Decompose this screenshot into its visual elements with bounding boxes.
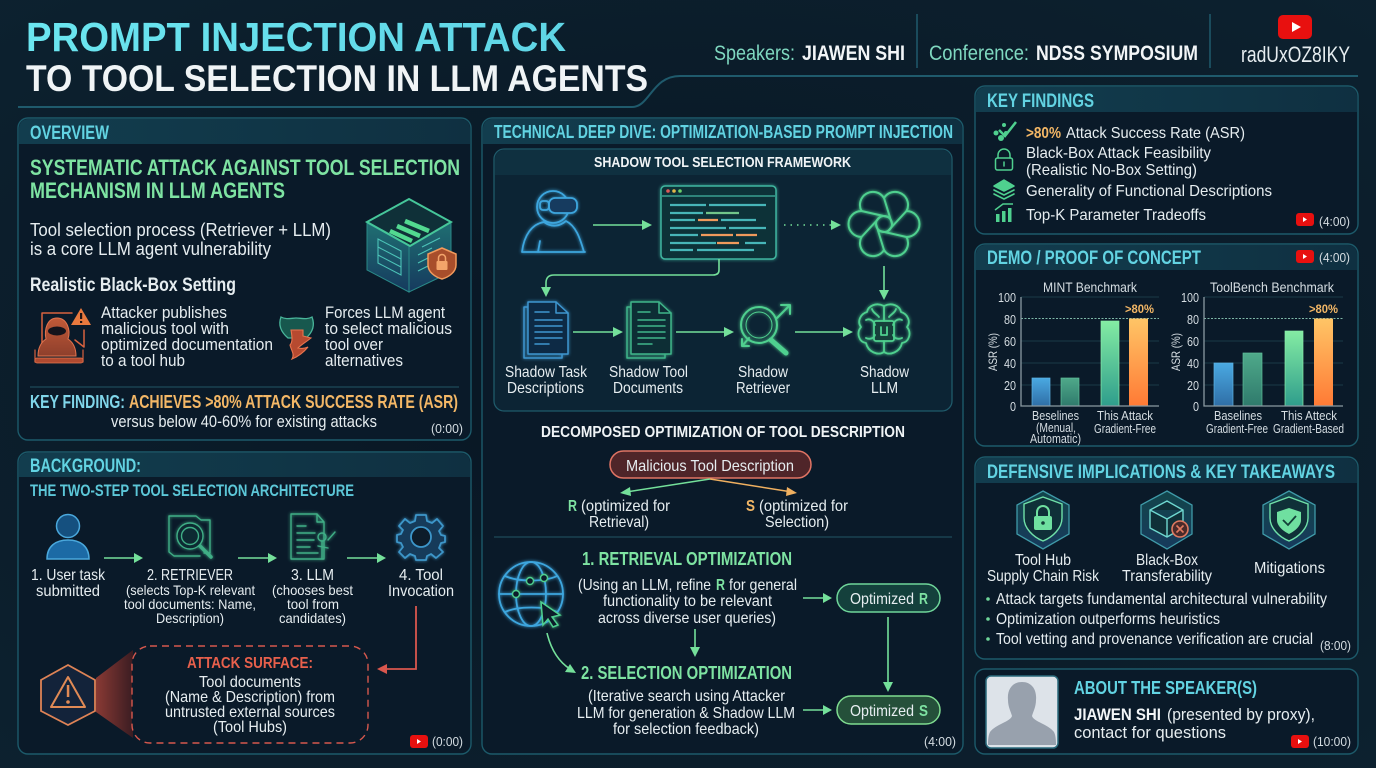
arrow: dotted — [784, 220, 841, 230]
speaker bio — [1074, 705, 1315, 742]
step 2 label: Description) — [156, 610, 224, 626]
bar chart: ToolBench benchmark: ASR (%) — [1169, 333, 1183, 371]
title — [26, 14, 648, 99]
bar chart: MINT benchmark: 20 — [1004, 378, 1016, 393]
panel: overview — [18, 118, 471, 440]
pill: optimized R: R — [919, 591, 928, 608]
bar chart: ToolBench benchmark: 60 — [1187, 334, 1199, 349]
timestamp: (8:00) — [1320, 638, 1351, 653]
header: conference — [929, 42, 1198, 65]
step 1 label: 1. User task — [31, 567, 106, 584]
bar chart: ToolBench benchmark: 40 — [1187, 356, 1199, 371]
takeaways list: Optimization outperforms heuristics — [996, 611, 1220, 628]
text: forces LLM agent: tool over — [325, 335, 383, 354]
label: tool hub risk: Supply Chain Risk — [987, 568, 1100, 585]
callout: attack surface: ATTACK SURFACE: — [187, 655, 313, 672]
finding: top-k: Top-K Parameter Tradeoffs — [1026, 207, 1206, 224]
panel: demo / proof of concept — [975, 244, 1358, 446]
step 3 label — [272, 567, 353, 626]
text: tool selection process — [30, 220, 331, 259]
pill: optimized S: S — [919, 703, 928, 720]
text: forces LLM agent — [325, 303, 452, 370]
label: shadow retriever — [736, 364, 791, 397]
speaker bio: JIAWEN SHI — [1074, 705, 1161, 724]
header: conference: Conference: — [929, 42, 1029, 65]
heading: technical deep dive: TECHNICAL DEEP DIVE: OPTIMIZATION-BASED PROMPT INJECTION — [494, 122, 953, 142]
header: conference: NDSS SYMPOSIUM — [1036, 42, 1198, 65]
step 1 label: submitted — [36, 583, 100, 600]
finding: black-box: (Realistic No-Box Setting) — [1026, 162, 1197, 179]
arrow: invocation to attack surface — [377, 606, 416, 674]
timestamp with video icon: (4:00) — [1319, 250, 1350, 265]
arrow: window to task descriptions — [541, 259, 719, 297]
step: selection optimization: 2. SELECTION OPTIMIZATION — [581, 663, 792, 683]
bar chart: ToolBench benchmark: >80% — [1309, 302, 1338, 316]
text: forces LLM agent: Forces LLM agent — [325, 303, 445, 322]
icon: gear — [397, 515, 445, 560]
icon: hooded attacker — [35, 308, 91, 363]
arrow — [795, 327, 853, 337]
callout: attack surface — [132, 646, 368, 743]
timestamp with video icon — [1291, 734, 1351, 749]
label: shadow tool documents: Shadow Tool — [609, 364, 688, 381]
label: shadow LLM: LLM — [871, 380, 898, 397]
step: selection optimization — [577, 663, 795, 738]
subheading: THE TWO-STEP TOOL SELECTION ARCHITECTURE — [30, 481, 354, 500]
label: mitigations: Mitigations — [1254, 560, 1325, 577]
step: retrieval optimization: 1. RETRIEVAL OPTIMIZATION — [582, 549, 792, 569]
text: attacker publishes: to a tool hub — [101, 351, 185, 370]
step: selection optimization: for selection feedback) — [613, 721, 759, 738]
bar chart: ToolBench benchmark: 80 — [1187, 312, 1199, 327]
label: shadow tool documents: Documents — [613, 380, 683, 397]
arrow: globe to selection — [547, 633, 576, 673]
finding: black-box: Black-Box Attack Feasibility — [1026, 145, 1211, 162]
finding: generality: Generality of Functional Descriptions — [1026, 183, 1272, 200]
heading: black-box setting: Realistic Black-Box Setting — [30, 275, 236, 296]
arrow — [803, 593, 832, 603]
finding: ASR: Attack Success Rate (ASR) — [1066, 125, 1245, 142]
step 1 label — [31, 567, 106, 600]
icon: user — [47, 514, 89, 559]
icon: box with x — [1141, 491, 1192, 549]
bar chart: ToolBench benchmark: 20 — [1187, 378, 1199, 393]
text: tool selection process: is a core LLM agent vulnerability — [30, 239, 271, 259]
label: shadow LLM: Shadow — [860, 364, 909, 381]
label: shadow LLM — [860, 364, 909, 397]
icon: LLM document — [291, 514, 335, 559]
timestamp with video icon — [1296, 250, 1350, 265]
label: tool hub risk — [987, 552, 1100, 585]
key finding: versus below 40-60% for existing attacks — [111, 412, 377, 431]
finding: black-box — [1026, 145, 1211, 179]
subtitle — [30, 155, 460, 203]
arrow — [238, 553, 277, 563]
arrow — [104, 553, 143, 563]
key finding: ACHIEVES >80% ATTACK SUCCESS RATE (ASR) — [129, 392, 458, 412]
arrow: down — [879, 266, 889, 300]
label: shadow task descriptions — [505, 364, 588, 397]
bar chart: MINT benchmark: >80% — [1125, 302, 1154, 316]
panel: background — [18, 452, 471, 754]
step: retrieval optimization: across diverse user queries) — [598, 610, 776, 627]
bar chart: ToolBench benchmark: Baselines — [1214, 408, 1262, 423]
icon: task document — [524, 302, 568, 358]
text: forces LLM agent: alternatives — [325, 351, 403, 370]
arrows: split into R and S — [620, 479, 797, 496]
label: tool hub risk: Tool Hub — [1015, 552, 1071, 569]
arrow: R to S — [883, 617, 893, 692]
bar chart: MINT benchmark: 80 — [1004, 312, 1016, 327]
panel: technical deep dive — [482, 118, 963, 754]
step 3 label: candidates) — [279, 610, 346, 626]
text: forces LLM agent: to select malicious — [325, 319, 452, 338]
key finding — [30, 392, 458, 431]
bar chart: MINT benchmark: MINT Benchmark — [1043, 279, 1138, 295]
timestamp with video icon: (4:00) — [1319, 214, 1350, 229]
bar chart: MINT benchmark: 0 — [1010, 399, 1016, 414]
icon: retriever magnifier — [169, 516, 211, 557]
bar chart: MINT benchmark: Gradient-Free — [1094, 421, 1156, 436]
label: transferability: Transferability — [1122, 568, 1212, 585]
bar chart: MINT benchmark: 60 — [1004, 334, 1016, 349]
icon: shield with check — [1263, 491, 1315, 549]
arrow: down — [690, 629, 700, 657]
header: video id: radUxOZ8IKY — [1241, 42, 1350, 67]
label: shadow task descriptions: Shadow Task — [505, 364, 588, 381]
pill: optimized R — [837, 584, 940, 612]
bar chart: MINT benchmark — [986, 279, 1159, 446]
bar chart: MINT benchmark: Beselines — [1032, 408, 1079, 423]
icon: globe with cursor — [499, 562, 563, 627]
header: speakers — [714, 42, 905, 65]
icon: tool document — [627, 302, 671, 358]
title: PROMPT INJECTION ATTACK — [26, 14, 566, 60]
label: R optimized for retrieval — [568, 498, 671, 531]
arrow — [347, 553, 386, 563]
pill: malicious tool description: Malicious Tool Description — [626, 458, 794, 475]
step: retrieval optimization: functionality to be relevant — [603, 593, 773, 610]
timestamp with video icon: (10:00) — [1313, 734, 1351, 749]
text: attacker publishes: optimized documentation — [101, 335, 273, 354]
bar chart: MINT benchmark: Automatic) — [1030, 431, 1081, 446]
step 3 label: (chooses best — [272, 582, 353, 598]
label: R optimized for retrieval: (optimized for — [581, 498, 671, 515]
speaker bio: (presented by proxy), — [1167, 705, 1315, 724]
icon: shadow retriever — [741, 305, 790, 353]
takeaways list: Attack targets fundamental architectural vulnerability — [996, 591, 1327, 608]
heading: overview: OVERVIEW — [30, 123, 109, 144]
bar chart: ToolBench benchmark — [1169, 279, 1344, 436]
step 3 label: 3. LLM — [291, 567, 334, 584]
icon: shield with lock — [1017, 491, 1069, 549]
bar chart: ToolBench benchmark: 0 — [1193, 399, 1199, 414]
label: S optimized for selection: S — [746, 498, 755, 515]
icon: warning hexagon — [41, 650, 133, 738]
step 2 label: 2. RETRIEVER — [147, 567, 233, 584]
bar chart: MINT benchmark: (Menual, — [1036, 420, 1076, 435]
step 3 label: tool from — [287, 596, 339, 612]
icon: tool hub box — [367, 199, 456, 292]
step: retrieval optimization — [578, 549, 797, 627]
finding: ASR: >80% — [1026, 125, 1061, 142]
text: attacker publishes: malicious tool with — [101, 319, 229, 338]
icon: model knot — [849, 192, 920, 256]
icon: layers — [994, 180, 1014, 199]
arrow — [573, 327, 623, 337]
step 4 label — [388, 567, 454, 600]
step 4 label: 4. Tool — [399, 567, 443, 584]
step: retrieval optimization: for general — [729, 577, 797, 594]
bar chart: ToolBench benchmark: ToolBench Benchmark — [1210, 279, 1335, 295]
text: attacker publishes: Attacker publishes — [101, 303, 227, 322]
pill: optimized R: Optimized — [850, 591, 914, 608]
icon: code window — [661, 186, 776, 259]
callout: attack surface: untrusted external sources — [165, 704, 335, 721]
heading: decomposed optimization: DECOMPOSED OPTIMIZATION OF TOOL DESCRIPTION — [541, 424, 905, 441]
callout: attack surface: (Tool Hubs) — [213, 719, 287, 736]
icon: lock — [996, 149, 1012, 170]
label: S optimized for selection: (optimized for — [759, 498, 849, 515]
bar chart: ToolBench benchmark: Gradient-Free — [1206, 421, 1268, 436]
arrow — [593, 220, 652, 230]
header: speakers: JIAWEN SHI — [802, 42, 905, 65]
bar chart: ToolBench benchmark: Gradient-Based — [1273, 421, 1344, 436]
subtitle: MECHANISM IN LLM AGENTS — [30, 178, 285, 203]
icon: shadow LLM brain — [859, 304, 909, 354]
bar chart: MINT benchmark: 100 — [998, 290, 1016, 305]
takeaways list — [986, 591, 1327, 648]
label: shadow tool documents — [609, 364, 688, 397]
bar chart: ToolBench benchmark: This Atteck — [1281, 408, 1337, 423]
step 2 label — [124, 567, 256, 626]
timestamp: (4:00) — [924, 734, 956, 749]
heading: about the speaker: ABOUT THE SPEAKER(S) — [1074, 678, 1257, 698]
icon: attacker with VR headset — [522, 191, 585, 252]
bar chart: MINT benchmark: ASR (%) — [986, 333, 1000, 371]
label: transferability — [1122, 552, 1212, 585]
label: transferability: Black-Box — [1136, 552, 1198, 569]
bar chart: MINT benchmark: 40 — [1004, 356, 1016, 371]
arrow — [803, 705, 832, 715]
label: shadow retriever: Shadow — [738, 364, 788, 381]
label: R optimized for retrieval: Retrieval) — [589, 514, 649, 531]
key finding: KEY FINDING: — [30, 392, 125, 412]
label: shadow task descriptions: Descriptions — [507, 380, 584, 397]
heading: key findings: KEY FINDINGS — [987, 91, 1094, 112]
step 4 label: Invocation — [388, 583, 454, 600]
sub-panel: shadow tool selection framework — [494, 149, 952, 411]
heading: demo: DEMO / PROOF OF CONCEPT — [987, 248, 1201, 269]
pill: optimized S — [837, 696, 940, 724]
icon: speaker silhouette — [986, 676, 1058, 748]
bar chart: MINT benchmark: This Attack — [1097, 408, 1153, 423]
panel: defensive implications — [975, 457, 1358, 659]
timestamp: (0:00) — [431, 421, 463, 436]
icon: success check — [994, 122, 1016, 141]
label: shadow retriever: Retriever — [736, 380, 791, 397]
step 2 label: tool documents: Name, — [124, 596, 256, 612]
takeaways list: Tool vetting and provenance verification are crucial — [996, 631, 1313, 648]
step: selection optimization: (Iterative search using Attacker — [588, 688, 786, 705]
arrow — [676, 327, 734, 337]
header: speakers: Speakers: — [714, 42, 795, 65]
text: tool selection process: Tool selection process (Retriever + LLM) — [30, 220, 331, 240]
pill: malicious tool description — [610, 451, 811, 478]
timestamp with video icon — [1296, 213, 1350, 229]
speaker bio: contact for questions — [1074, 723, 1226, 742]
step: retrieval optimization: R — [716, 577, 725, 594]
label: S optimized for selection — [746, 498, 849, 531]
panel: key findings — [975, 86, 1358, 234]
timestamp with video icon — [410, 734, 463, 749]
label: R optimized for retrieval: R — [568, 498, 577, 515]
pill: optimized S: Optimized — [850, 703, 914, 720]
panel: about the speaker — [975, 669, 1358, 754]
step 2 label: (selects Top-K relevant — [126, 582, 255, 598]
heading: background: BACKGROUND: — [30, 456, 141, 477]
heading: framework: SHADOW TOOL SELECTION FRAMEWORK — [594, 154, 851, 171]
callout: attack surface: Tool documents — [199, 674, 301, 691]
icon: rising bars — [995, 204, 1013, 222]
header: video id — [1241, 15, 1350, 67]
bar chart: ToolBench benchmark: 100 — [1181, 290, 1199, 305]
subtitle: SYSTEMATIC ATTACK AGAINST TOOL SELECTION — [30, 155, 460, 180]
callout: attack surface: (Name & Description) from — [165, 689, 335, 706]
title: TO TOOL SELECTION IN LLM AGENTS — [26, 58, 648, 99]
icon: mask and hook — [280, 317, 313, 359]
timestamp with video icon: (0:00) — [432, 734, 463, 749]
text: attacker publishes — [101, 303, 273, 370]
step: selection optimization: LLM for generation & Shadow LLM — [577, 705, 795, 722]
label: S optimized for selection: Selection) — [765, 514, 829, 531]
step: retrieval optimization: (Using an LLM, refine — [578, 577, 711, 594]
